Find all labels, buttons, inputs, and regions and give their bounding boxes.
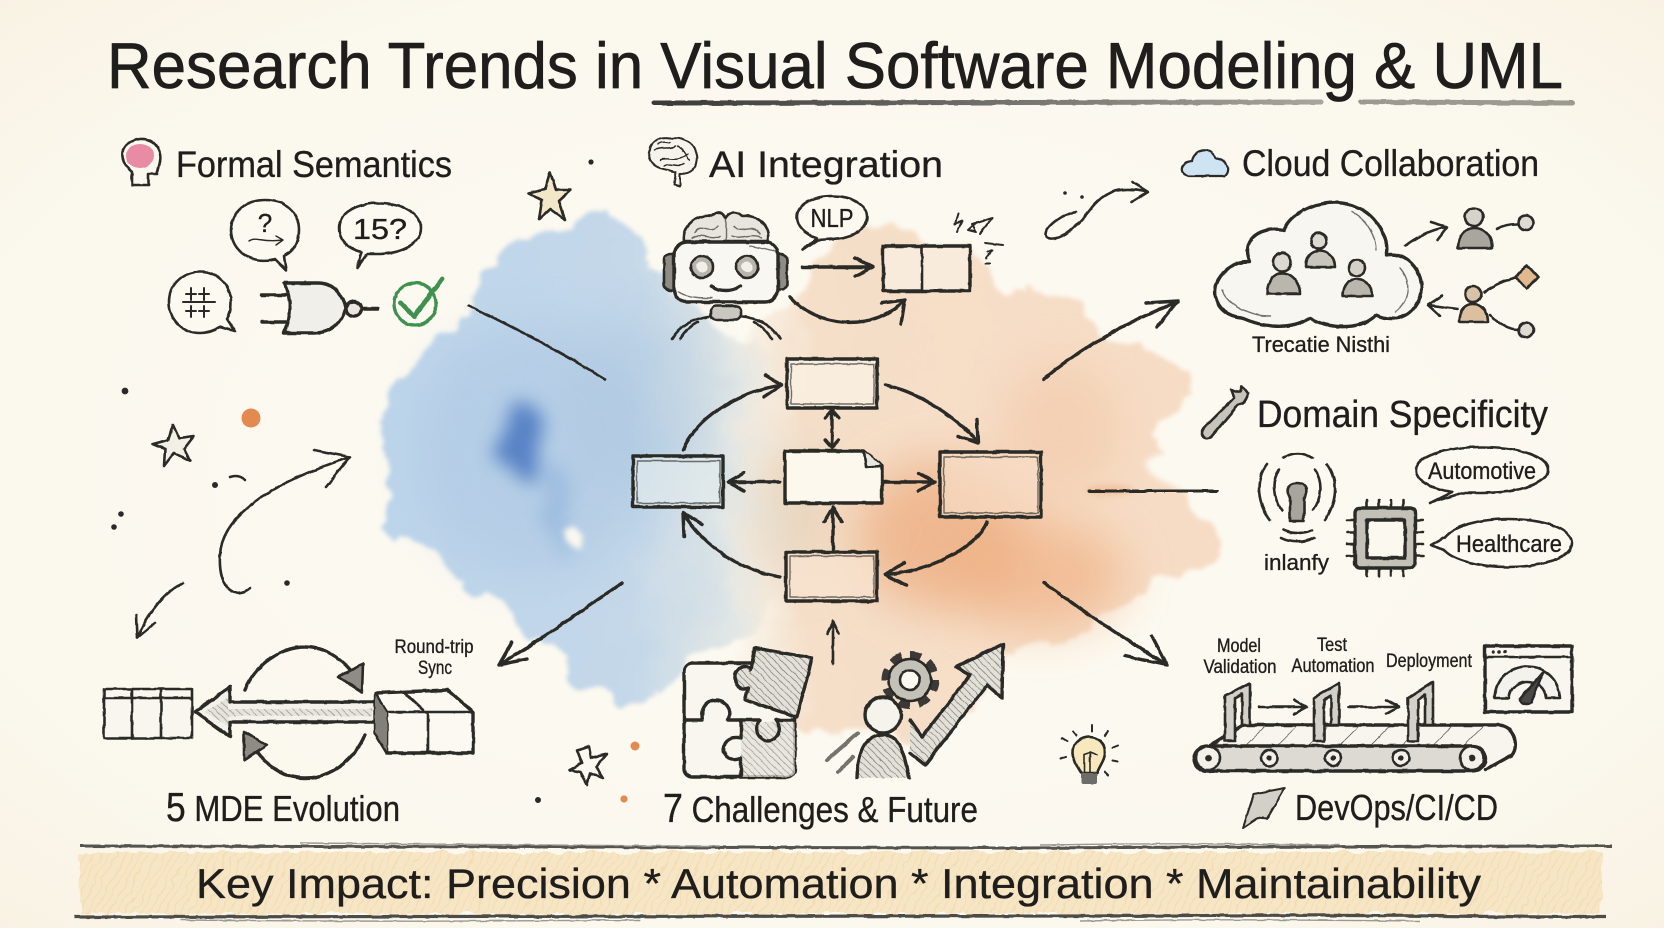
speech bubble: logic symbols [169, 272, 235, 333]
banner band [80, 852, 1602, 914]
label: round-trip sync: Sync [418, 658, 452, 679]
arrow: center to left [728, 473, 780, 491]
speech bubble: question arrow [231, 200, 299, 270]
person [1267, 253, 1300, 294]
arrow: small left arrow down [136, 583, 183, 638]
panel: MDE evolution [104, 637, 474, 830]
robot neck [711, 306, 741, 320]
robot brain top [684, 212, 769, 241]
label: round-trip sync [394, 637, 474, 679]
speech bubble: symbols: 15? [353, 214, 407, 246]
sparks [955, 214, 1003, 263]
model box [883, 246, 970, 291]
icon: rocket [1243, 788, 1285, 828]
person [1343, 260, 1372, 296]
dots [111, 159, 1084, 803]
hub: central model diagram [633, 359, 1041, 601]
panel: challenges and future [663, 644, 1118, 831]
callout: automotive: Automotive [1428, 458, 1536, 485]
speech bubble: NLP: NLP [810, 203, 854, 233]
panel: formal semantics [122, 139, 452, 333]
conveyor rollers [1196, 746, 1484, 770]
gate 3 [1408, 682, 1433, 741]
callout: healthcare [1431, 519, 1572, 567]
box: bottom [786, 552, 877, 601]
title: Research Trends in Visual Software Modeling & UML [107, 29, 1563, 102]
labels: pipeline stages: Deployment [1386, 651, 1473, 672]
person [1306, 233, 1335, 267]
icon: rising arrow [910, 644, 1003, 765]
box: top [787, 359, 877, 408]
left box [104, 689, 192, 738]
speech bubble: NLP [797, 196, 867, 250]
decorative stars and dots [111, 159, 1084, 803]
arrow: cloud to person [1405, 222, 1447, 246]
orange dots [242, 408, 640, 803]
arrow: top to right [885, 385, 978, 443]
person with node [1458, 208, 1534, 248]
arrow: robot to model [802, 258, 873, 276]
icon: brain [649, 138, 697, 186]
labels: pipeline stages: Automation [1292, 656, 1374, 677]
gate 1 [1225, 683, 1250, 741]
heading: AI integration: AI Integration [709, 144, 943, 185]
label: garbled antenna caption: inlanfy [1264, 550, 1329, 575]
heading: cloud collaboration: Cloud Collaboration [1242, 143, 1539, 184]
title underline [654, 102, 1573, 103]
arrow: robot curved to model [790, 297, 905, 324]
icon: small cloud [1182, 150, 1228, 176]
speech bubble: question arrow: ? [258, 208, 272, 238]
arrow: person to cloud [1428, 296, 1458, 316]
arrow: curved left arrow up [220, 450, 350, 593]
arrow: bottom to left [683, 513, 780, 577]
icon: puzzle [684, 648, 812, 777]
arrow: center to right [882, 473, 935, 491]
icon: light bulb [1060, 725, 1118, 784]
arrow: left to top [683, 375, 782, 450]
icon: wrench [1202, 386, 1248, 438]
right 3D box [375, 690, 473, 753]
box: center document [785, 451, 882, 503]
big cloud with people [1215, 203, 1422, 327]
icon: chip [1347, 500, 1423, 576]
robot ears [664, 254, 678, 290]
arrow: challenges to hub [827, 621, 839, 664]
icon: robot [664, 212, 787, 339]
labels: pipeline stages: Validation [1204, 657, 1276, 678]
callout: automotive [1416, 447, 1548, 503]
top cycle arrow [245, 647, 363, 692]
conveyor belt [1208, 725, 1515, 770]
box: right [940, 452, 1041, 517]
robot shoulders [672, 316, 780, 339]
icon: gauge dashboard [1485, 646, 1572, 712]
arrow: bottom to center [824, 507, 842, 550]
banner text: Key Impact: Precision * Automation * Integration * Maintainability [196, 860, 1481, 907]
big left arrow [195, 687, 375, 737]
arrow: hub to devops [1044, 583, 1167, 665]
star bottom [570, 746, 607, 785]
icon: gear [885, 655, 935, 705]
arrow: right to bottom [885, 522, 987, 585]
label: garbled cloud caption: Trecatie Nisthi [1252, 332, 1390, 357]
star left [153, 425, 194, 466]
icon: green check [394, 279, 442, 325]
icon: person [827, 697, 909, 778]
banner: key impact [74, 843, 1612, 921]
labels: pipeline stages: Test [1317, 635, 1348, 656]
panel: domain specificity [1202, 386, 1572, 576]
arrow: formal semantics to hub [469, 306, 605, 379]
panel: AI integration [649, 138, 1003, 339]
heading: MDE evolution: 5 MDE Evolution [166, 784, 400, 830]
arrow: gate 2 to 3 [1349, 700, 1399, 714]
icon: head with pink brain [122, 139, 160, 185]
gate 2 [1314, 683, 1339, 741]
heading: challenges and future: 7 Challenges & Future [663, 785, 978, 831]
panel: cloud collaboration [1182, 143, 1539, 357]
icon: antenna [1259, 454, 1335, 542]
robot head [674, 242, 778, 302]
label: round-trip sync: Round-trip [394, 637, 474, 658]
labels: pipeline stages [1204, 635, 1473, 678]
icon: conveyor with gates [1194, 682, 1515, 771]
box: left [633, 456, 723, 507]
heading: domain specificity: Domain Specificity [1257, 394, 1548, 436]
blue wash [376, 206, 810, 708]
arrow: hub to MDE [499, 583, 622, 665]
callout: healthcare: Healthcare [1456, 531, 1562, 558]
bottom cycle arrow [244, 732, 365, 778]
watercolor wash: blue and orange [376, 206, 1226, 735]
icon: logic gate [262, 283, 378, 333]
banner rules [74, 843, 1612, 921]
arrow: gate 1 to 2 [1259, 700, 1307, 714]
arrow: curly top [1046, 182, 1148, 239]
star top [528, 172, 571, 220]
heading: devops CI/CD: DevOps/CI/CD [1295, 787, 1498, 828]
panel: devops CI/CD [1194, 635, 1572, 828]
arrow: hub to cloud [1044, 301, 1178, 379]
labels: pipeline stages: Model [1217, 636, 1261, 657]
arrow: top to center [825, 410, 839, 448]
person with branches [1459, 265, 1538, 338]
speech bubble: symbols [339, 203, 421, 268]
arrow: hub to domain [1089, 490, 1217, 492]
orange wash [720, 222, 1226, 735]
heading: formal semantics: Formal Semantics [176, 144, 452, 185]
